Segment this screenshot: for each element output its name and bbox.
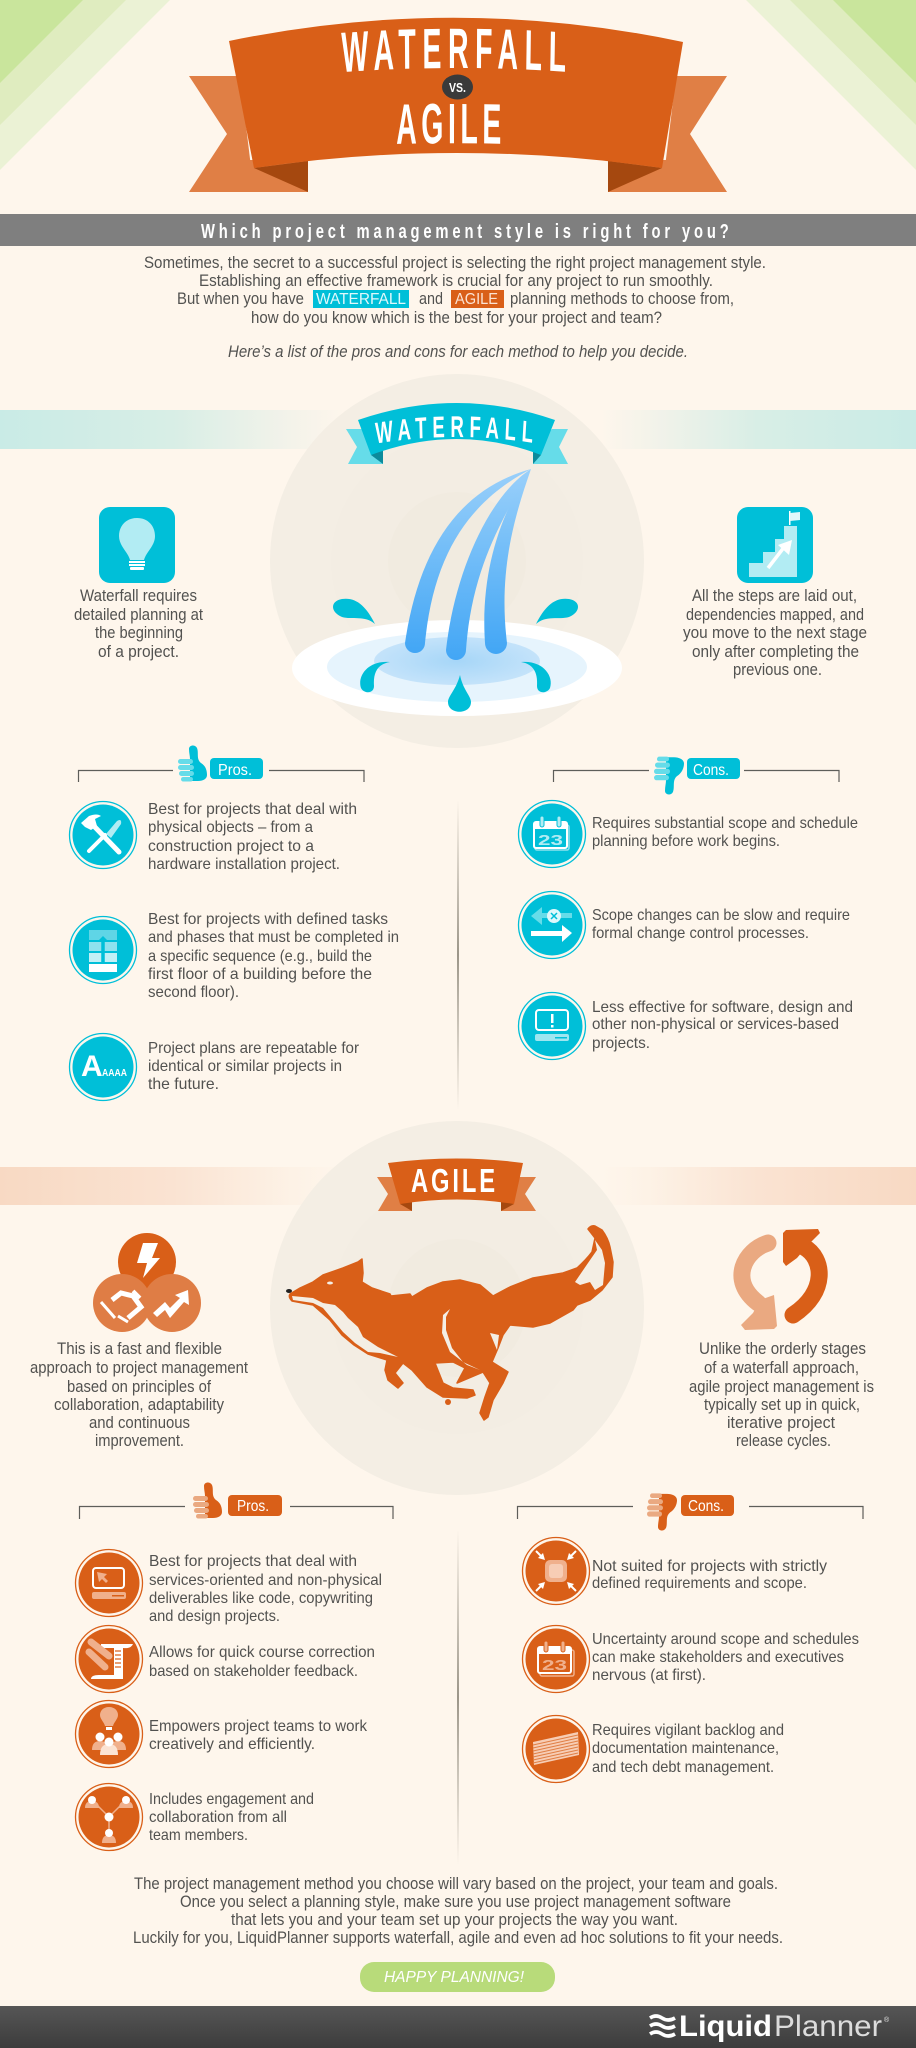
- icon: repeated letter A: A: [81, 1050, 103, 1083]
- waterfall pros header: [78, 745, 364, 782]
- text: item: [592, 1631, 859, 1684]
- agile right text: release cycles.: [736, 1432, 831, 1450]
- text: item: team members.: [149, 1827, 248, 1844]
- text: item: [592, 907, 850, 942]
- text: item: identical or similar projects in: [148, 1058, 342, 1075]
- agile right text: iterative project: [727, 1414, 835, 1432]
- intro text: [144, 254, 766, 361]
- text: item: [592, 815, 858, 850]
- icon: running fox: [286, 1226, 613, 1420]
- text: item: Best for projects with defined tasks: [148, 911, 388, 928]
- icon: hammer and screwdriver: [70, 802, 136, 868]
- text: item: planning before work begins.: [592, 833, 780, 850]
- intro text: WATERFALL: [316, 291, 406, 308]
- text: item: [149, 1644, 375, 1680]
- happy planning button: [360, 1962, 555, 1992]
- intro text: Establishing an effective framework is crucial for any project to run smoothly.: [199, 272, 713, 290]
- icon: calendar: 23: [542, 1657, 567, 1674]
- text: item: construction project to a: [148, 838, 314, 855]
- ribbon word: Agile: AGILE: [411, 1162, 498, 1199]
- text: item: formal change control processes.: [592, 925, 809, 942]
- text: item: physical objects – from a: [148, 819, 313, 836]
- waterfall right text: dependencies mapped, and: [686, 606, 864, 624]
- agile right text: agile project management is: [689, 1378, 874, 1396]
- icon: stairs with flag tile: [737, 507, 813, 583]
- text: item: Allows for quick course correction: [149, 1644, 375, 1661]
- happy planning button: HAPPY PLANNING!: [384, 1969, 525, 1986]
- label: pros: [228, 1495, 282, 1516]
- agile con item 2: [522, 1626, 859, 1692]
- waterfall right text: previous one.: [733, 661, 822, 679]
- agile left text: based on principles of: [67, 1378, 211, 1396]
- logo wordmark: Liquid: [679, 2010, 772, 2043]
- intro text: how do you know which is the best for your project and team?: [251, 309, 662, 327]
- agile pro item 3: [76, 1700, 368, 1768]
- label: pros: Pros.: [218, 762, 252, 779]
- title word: Waterfall: WATERFALL: [341, 28, 565, 72]
- icon: thumbs down: [654, 757, 684, 795]
- closing text: Once you select a planning style, make sure you use project management software: [180, 1893, 731, 1911]
- waterfall right text: [683, 587, 867, 679]
- icon: thumbs up: [178, 745, 207, 782]
- icon: opposing arrows: [518, 892, 586, 958]
- text: item: hardware installation project.: [148, 856, 340, 873]
- intro text: planning methods to choose from,: [510, 290, 734, 308]
- closing text: Luckily for you, LiquidPlanner supports waterfall, agile and even ad hoc solutions to fit your needs.: [133, 1929, 783, 1947]
- logo wordmark: planner: Planner: [774, 2010, 882, 2043]
- text: item: collaboration from all: [149, 1809, 287, 1826]
- banner main: [229, 18, 683, 168]
- text: item: [592, 1558, 827, 1592]
- agile pro item 2: [76, 1626, 375, 1692]
- icon: thumbs up: [193, 1482, 222, 1518]
- waterfall section band: [0, 410, 916, 449]
- waterfall pro item 2: [70, 911, 399, 1001]
- text: item: other non-physical or services-based: [592, 1016, 839, 1033]
- text: item: [149, 1791, 314, 1844]
- text: item: and phases that must be completed in: [148, 929, 399, 946]
- text: item: Best for projects that deal with: [148, 801, 357, 818]
- registered mark: ®: [884, 2016, 890, 2024]
- icon: monitor with cursor: [76, 1550, 142, 1616]
- text: item: based on stakeholder feedback.: [149, 1663, 358, 1680]
- text: item: Best for projects that deal with: [149, 1553, 357, 1570]
- agile right text: [689, 1340, 874, 1450]
- text: item: a specific sequence (e.g., build the: [148, 948, 372, 965]
- text: item: Uncertainty around scope and schedules: [592, 1631, 859, 1648]
- agile right text: of a waterfall approach,: [704, 1359, 859, 1377]
- waterfall pro item 3: [70, 1034, 360, 1100]
- closing text: The project management method you choose will vary based on the project, your team and goals.: [134, 1875, 778, 1893]
- waterfall pro item 1: [70, 801, 357, 873]
- icon: lightning, handshake, growth trio: [93, 1233, 201, 1332]
- icon: liquidplanner waves: [650, 2016, 675, 2036]
- agile backdrop circles: [270, 1121, 644, 1495]
- intro text: and: [419, 290, 443, 308]
- agile ribbon: [377, 1158, 536, 1211]
- text: item: services-oriented and non-physical: [149, 1572, 382, 1589]
- text: item: deliverables like code, copywriting: [149, 1590, 373, 1607]
- text: item: the future.: [148, 1076, 219, 1093]
- icon: calendar: 23: [538, 832, 563, 849]
- icon: stacked floors with arrow: [70, 916, 136, 984]
- waterfall left text: the beginning: [95, 624, 183, 642]
- intro text: Here’s a list of the pros and cons for each method to help you decide.: [228, 343, 688, 361]
- waterfall left text: of a project.: [98, 643, 179, 661]
- title word: Agile: AGILE: [397, 104, 500, 144]
- text: item: first floor of a building before the: [148, 966, 372, 983]
- vs badge: VS.: [449, 80, 466, 95]
- closing text: that lets you and your team set up your projects the way you want.: [231, 1911, 678, 1929]
- text: item: Requires vigilant backlog and: [592, 1722, 784, 1739]
- text: item: and design projects.: [149, 1608, 280, 1625]
- agile pros header: [80, 1482, 393, 1519]
- subtitle bar: Which project management style is right for you?: [201, 220, 729, 243]
- text: item: [592, 999, 853, 1052]
- waterfall left text: detailed planning at: [74, 606, 203, 624]
- label: cons: [681, 1495, 734, 1516]
- agile con item 3: [522, 1716, 784, 1782]
- agile left text: [30, 1340, 248, 1450]
- corner decoration: top left green stripes: [0, 0, 170, 170]
- text: item: Scope changes can be slow and require: [592, 907, 850, 924]
- icon: stack of documents: [522, 1716, 590, 1782]
- icon: iteration cycle arrows: [741, 1229, 820, 1330]
- icon: connected team network: [76, 1784, 142, 1850]
- intro text: But when you have: [177, 290, 304, 308]
- agile section band: [0, 1167, 916, 1205]
- footer bar: [0, 2006, 916, 2048]
- waterfall con item 1: [518, 800, 858, 868]
- icon: monitor with alert: [518, 992, 586, 1060]
- closing text: [133, 1875, 783, 1947]
- ribbon word: Waterfall: WATERFALL: [374, 416, 532, 443]
- icon: thumbs down: [647, 1493, 677, 1531]
- agile pro item 1: [76, 1550, 382, 1625]
- agile left text: improvement.: [95, 1432, 184, 1450]
- banner tails: [189, 76, 727, 192]
- subtitle bar: [0, 214, 916, 246]
- agile con item 1: [522, 1538, 827, 1604]
- icon: calendar: [518, 800, 586, 868]
- agile left text: and continuous: [89, 1414, 190, 1432]
- text: item: projects.: [592, 1035, 650, 1052]
- corner decoration: top right green stripes: [746, 0, 916, 170]
- waterfall backdrop circles: [270, 374, 644, 748]
- waterfall left text: Waterfall requires: [80, 587, 197, 605]
- text: item: and tech debt management.: [592, 1759, 774, 1776]
- text: item: creatively and efficiently.: [149, 1736, 315, 1753]
- agile left text: This is a fast and flexible: [57, 1340, 222, 1358]
- waterfall con item 2: [518, 892, 850, 958]
- text: item: Project plans are repeatable for: [148, 1040, 360, 1057]
- agile left text: collaboration, adaptability: [54, 1396, 225, 1414]
- text: item: documentation maintenance,: [592, 1740, 779, 1757]
- text: item: Requires substantial scope and schedule: [592, 815, 858, 832]
- intro text: AGILE: [455, 291, 498, 308]
- waterfall con item 3: [518, 992, 853, 1060]
- text: item: [149, 1553, 382, 1625]
- label: cons: Cons.: [688, 1498, 724, 1515]
- icon: repeated letter A: AAAA: [102, 1068, 127, 1079]
- waterfall ribbon: [346, 403, 568, 464]
- text: item: [148, 1040, 360, 1093]
- icon: team with light bulb: [76, 1700, 142, 1768]
- text: item: second floor).: [148, 984, 239, 1001]
- agile right text: typically set up in quick,: [704, 1396, 860, 1414]
- waterfall right text: only after completing the: [692, 643, 859, 661]
- text: item: [592, 1722, 784, 1776]
- intro text: Sometimes, the secret to a successful project is selecting the right project management style.: [144, 254, 766, 272]
- text: item: [149, 1718, 368, 1753]
- icon: repeated letter A: [70, 1034, 136, 1100]
- text: item: Less effective for software, design and: [592, 999, 853, 1016]
- agile pro item 4: [76, 1784, 314, 1850]
- text: item: Not suited for projects with strictly: [592, 1558, 827, 1575]
- label: cons: Cons.: [693, 762, 729, 779]
- waterfall left text: [74, 587, 203, 661]
- label: pros: Pros.: [237, 1498, 269, 1515]
- icon: light bulb tile: [99, 507, 175, 583]
- text: item: defined requirements and scope.: [592, 1575, 807, 1592]
- banner folds: [254, 161, 662, 192]
- text: item: Empowers project teams to work: [149, 1718, 368, 1735]
- text: item: nervous (at first).: [592, 1667, 706, 1684]
- agile cons header: [518, 1493, 863, 1531]
- waterfall cons header: [554, 757, 839, 795]
- title banner: [189, 18, 727, 192]
- agile right text: Unlike the orderly stages: [699, 1340, 866, 1358]
- vs badge: [442, 74, 473, 100]
- icon: calendar: [522, 1626, 590, 1692]
- text: item: [148, 911, 399, 1001]
- waterfall right text: All the steps are laid out,: [692, 587, 857, 605]
- agile left text: approach to project management: [30, 1359, 248, 1377]
- icon: inward arrows: [522, 1538, 590, 1604]
- icon: fountain illustration: [292, 469, 622, 716]
- text: item: [148, 801, 357, 873]
- label: pros: [210, 758, 263, 779]
- label: cons: [687, 758, 740, 779]
- waterfall right text: you move to the next stage: [683, 624, 867, 642]
- text: item: can make stakeholders and executives: [592, 1649, 844, 1666]
- text: item: Includes engagement and: [149, 1791, 314, 1808]
- icon: pens and scroll: [76, 1626, 142, 1692]
